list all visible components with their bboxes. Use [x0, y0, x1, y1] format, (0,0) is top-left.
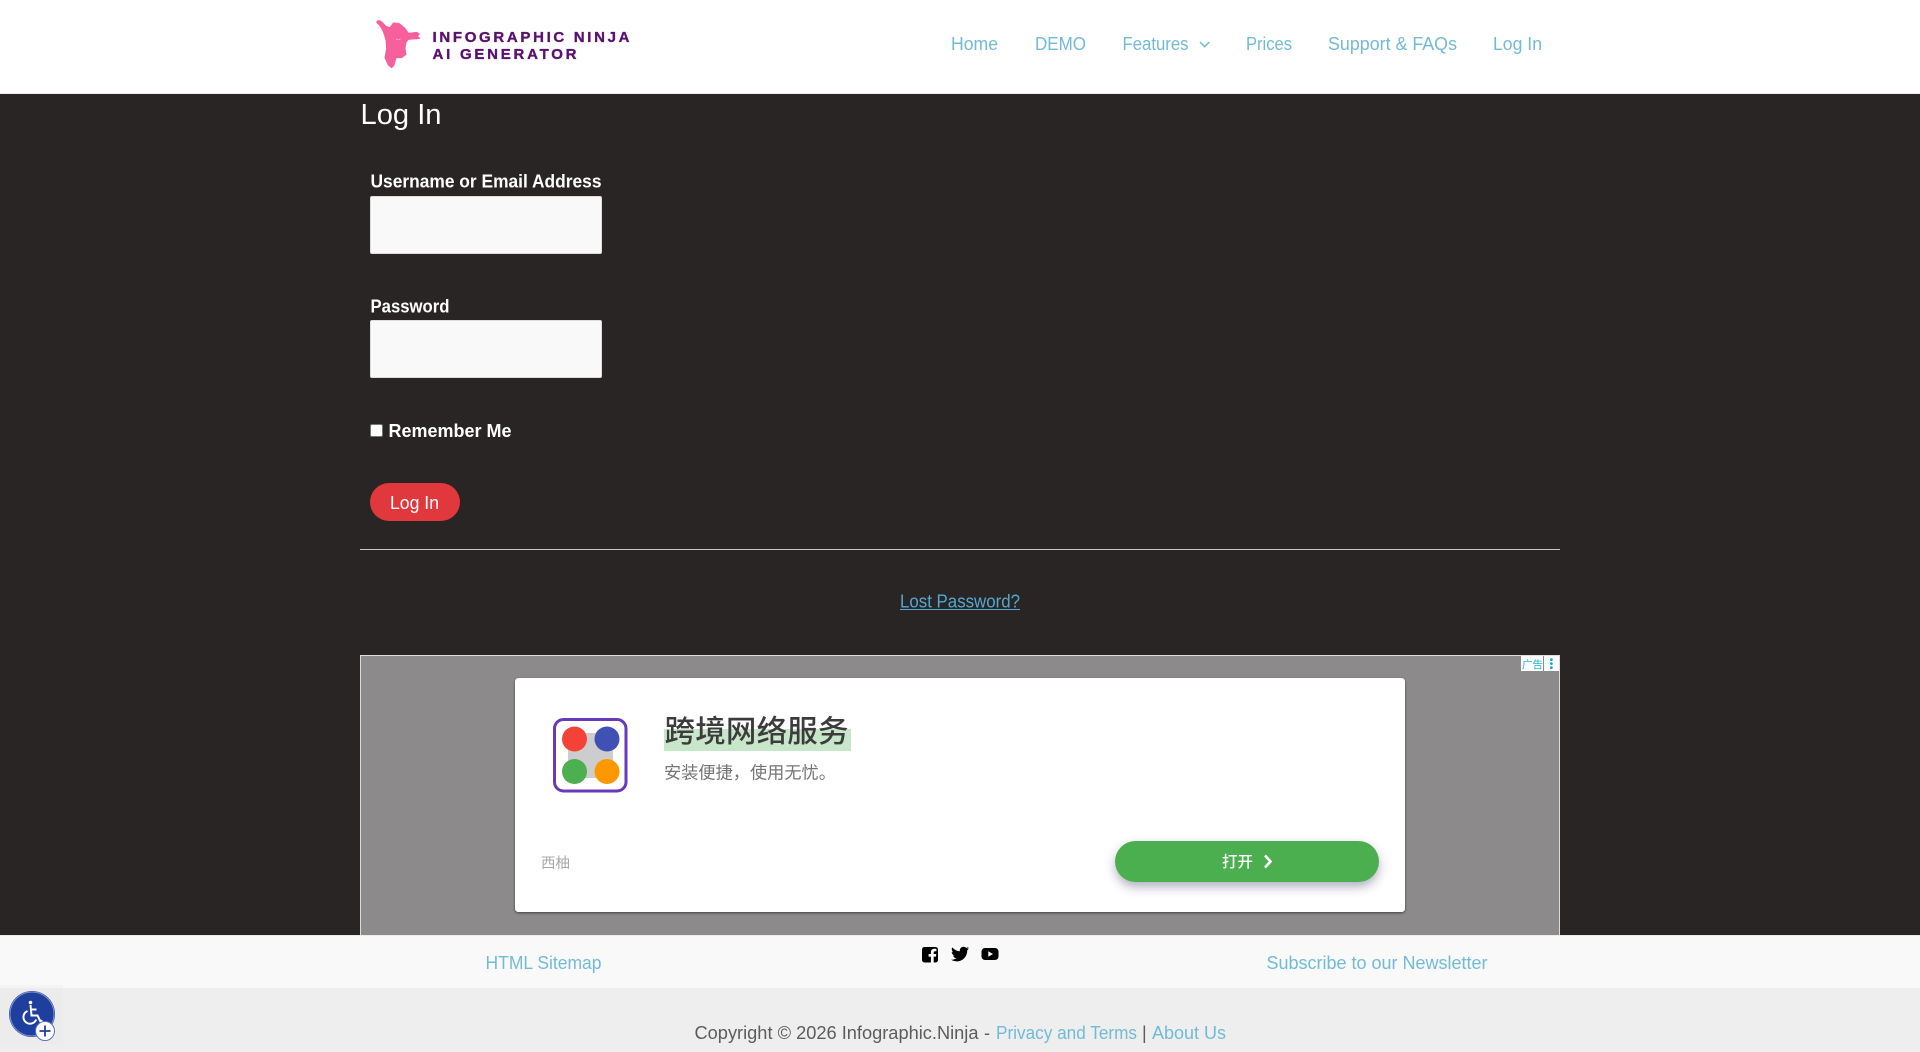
advertisement panel	[360, 656, 1560, 936]
logo text: AI GENERATOR	[432, 46, 577, 63]
navigation menu	[951, 34, 1542, 54]
icon: app logo	[554, 720, 626, 791]
privacy link: Privacy and Terms	[996, 1023, 1137, 1043]
advertiser name: 西柚	[541, 852, 570, 873]
separator dash: -	[984, 1023, 990, 1043]
site header	[0, 0, 1920, 94]
open button: 打开	[1222, 850, 1253, 872]
navigation menu: Prices	[1246, 34, 1292, 54]
ad subtitle: 安装便捷，使用无忧。	[664, 758, 836, 784]
ad card	[515, 678, 1405, 912]
icon: wheelchair	[23, 1001, 42, 1024]
remember me checkbox	[370, 424, 382, 436]
navigation menu: Home	[951, 34, 998, 54]
lost password link: Lost Password?	[900, 592, 1020, 612]
navigation menu: Log In	[1493, 34, 1542, 54]
html sitemap link: HTML Sitemap	[486, 953, 602, 973]
navigation menu: DEMO	[1035, 34, 1086, 54]
password label: Password	[370, 296, 450, 316]
footer links bar	[0, 935, 1920, 988]
login form	[370, 172, 602, 521]
remember me label: Remember Me	[388, 421, 512, 441]
ad tag	[1521, 656, 1559, 672]
username input	[370, 196, 602, 254]
logo text: INFOGRAPHIC NINJA	[432, 29, 630, 46]
about link: About Us	[1152, 1023, 1226, 1043]
log in button: Log In	[390, 493, 439, 513]
navigation menu: Features	[1122, 34, 1188, 54]
separator bar: |	[1142, 1023, 1147, 1043]
page heading: Log In	[360, 99, 442, 131]
icon: plus badge	[36, 1022, 54, 1040]
newsletter link: Subscribe to our Newsletter	[1266, 953, 1488, 973]
ad title: 跨境网络服务	[664, 707, 848, 751]
icon: twitter	[951, 947, 969, 961]
accessibility widget	[0, 985, 63, 1045]
navigation menu: Support & FAQs	[1328, 34, 1457, 54]
password input	[370, 320, 602, 378]
icon: youtube	[982, 948, 998, 960]
ad tag: 广告	[1522, 657, 1543, 672]
log in button	[370, 483, 460, 521]
username label: Username or Email Address	[370, 172, 602, 192]
copyright text: Copyright © 2026 Infographic.Ninja	[694, 1023, 979, 1043]
logo text	[432, 29, 630, 63]
open button	[1115, 841, 1379, 882]
logo	[377, 21, 630, 68]
icon: pink ninja	[377, 21, 420, 68]
copyright bar	[0, 988, 1920, 1052]
icon: facebook	[922, 947, 938, 962]
